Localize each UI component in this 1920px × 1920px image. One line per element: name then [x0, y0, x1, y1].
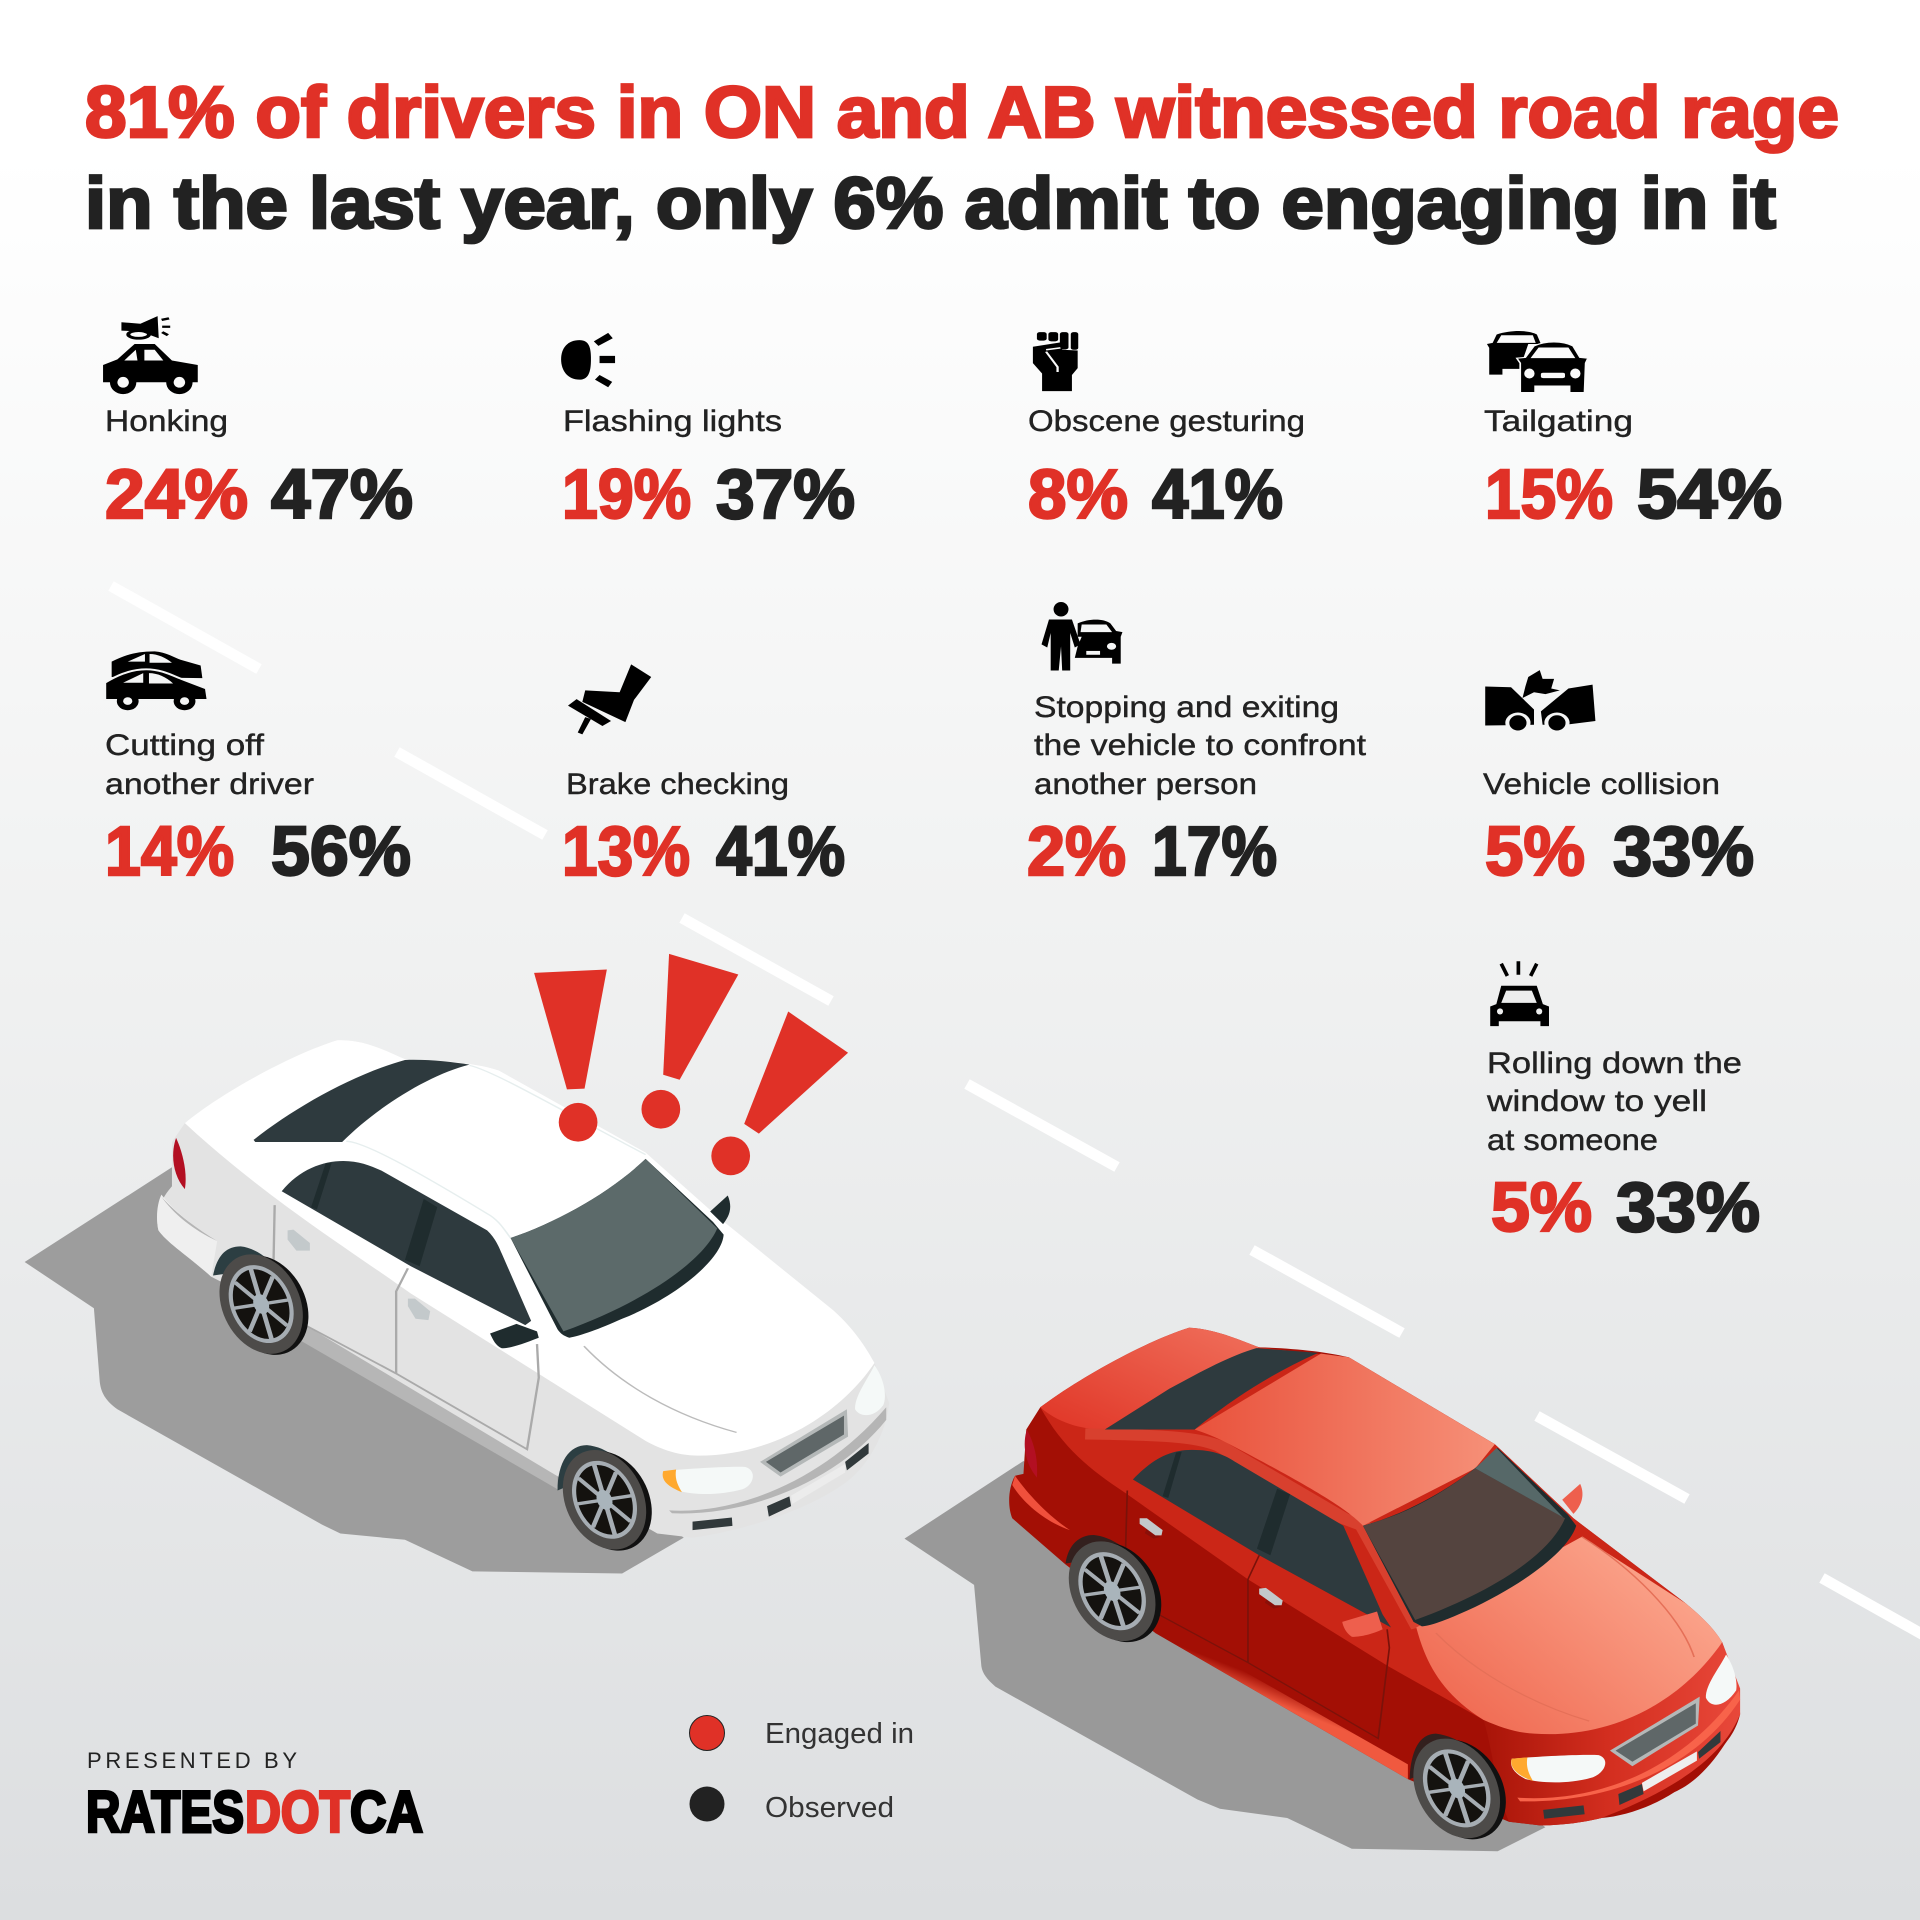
label: rolling down the window: Rolling down the — [1487, 1047, 1742, 1080]
stats: rolling down the window: 5% — [1491, 1168, 1592, 1246]
label: vehicle collision: Vehicle collision — [1483, 768, 1720, 801]
road dashes — [111, 586, 1920, 1660]
stats: brake checking: 41% — [716, 812, 845, 890]
label: flashing lights: Flashing lights — [563, 405, 782, 438]
stats: honking — [105, 455, 413, 533]
stats: stopping and exiting: 2% — [1027, 812, 1126, 890]
label: cutting off: another driver — [105, 768, 314, 801]
stats: brake checking: 13% — [562, 812, 690, 890]
logo: ratesdotca: CA — [350, 1780, 423, 1845]
title: in the last year, only 6% admit to engaging in it — [85, 164, 1776, 244]
legend: observed: Observed — [765, 1792, 894, 1824]
stats: honking: 24% — [105, 455, 248, 533]
label: stopping and exiting: the vehicle to confront — [1034, 729, 1367, 762]
label: rolling down the window: at someone — [1487, 1124, 1658, 1157]
stats: tailgating: 54% — [1637, 455, 1782, 533]
stats: obscene gesturing: 41% — [1152, 455, 1283, 533]
title — [85, 73, 1839, 244]
label: cutting off: Cutting off — [105, 729, 265, 762]
presented by: PRESENTED BY — [87, 1748, 297, 1773]
stats: cutting off — [105, 812, 411, 890]
label: stopping and exiting: Stopping and exiting — [1034, 691, 1339, 724]
stats: stopping and exiting — [1027, 812, 1277, 890]
stats: obscene gesturing: 8% — [1028, 455, 1128, 533]
label: rolling down the window — [1486, 1047, 1742, 1157]
logo: ratesdotca: RATES — [86, 1780, 244, 1845]
label: brake checking: Brake checking — [566, 768, 789, 801]
label: stopping and exiting — [1034, 691, 1367, 801]
legend: engaged in — [690, 1716, 914, 1750]
icon: person and car — [1042, 602, 1122, 670]
stats: rolling down the window — [1491, 1168, 1760, 1246]
stats: cutting off: 14% — [105, 812, 234, 890]
icon: car with window rays — [1490, 961, 1549, 1026]
label: obscene gesturing: Obscene gesturing — [1028, 405, 1305, 438]
stats: honking: 47% — [271, 455, 413, 533]
icon: brake pedal — [568, 664, 651, 734]
white car — [25, 1040, 889, 1573]
label: rolling down the window: window to yell — [1486, 1085, 1707, 1118]
label: stopping and exiting: another person — [1034, 768, 1257, 801]
red car — [904, 1328, 1740, 1851]
label: cutting off — [105, 729, 314, 801]
logo: ratesdotca — [86, 1780, 423, 1845]
icon: fist — [1033, 332, 1078, 391]
stats: flashing lights: 37% — [716, 455, 855, 533]
stats: flashing lights: 19% — [562, 455, 691, 533]
legend: engaged in: Engaged in — [765, 1718, 914, 1750]
stats: tailgating: 15% — [1485, 455, 1613, 533]
stats: vehicle collision: 5% — [1485, 812, 1585, 890]
stats: cutting off: 56% — [271, 812, 411, 890]
stats: vehicle collision — [1485, 812, 1754, 890]
icon: cutting off — [105, 651, 208, 710]
icon: collision — [1485, 670, 1595, 733]
label: tailgating: Tailgating — [1484, 405, 1633, 438]
title: 81% of drivers in ON and AB witnessed road rage — [85, 73, 1839, 153]
stats: obscene gesturing — [1028, 455, 1283, 533]
stats: brake checking — [562, 812, 845, 890]
logo: ratesdotca: DOT — [245, 1780, 350, 1845]
icon: tailgating — [1487, 331, 1588, 393]
icon: honking car — [103, 316, 198, 394]
stats: vehicle collision: 33% — [1613, 812, 1754, 890]
stats: rolling down the window: 33% — [1616, 1168, 1760, 1246]
stats: flashing lights — [562, 455, 855, 533]
stats: stopping and exiting: 17% — [1152, 812, 1277, 890]
legend: observed — [690, 1786, 894, 1824]
icon: flashing lights — [561, 333, 615, 387]
label: honking: Honking — [105, 405, 228, 438]
stats: tailgating — [1485, 455, 1782, 533]
exclamation marks — [534, 954, 848, 1175]
